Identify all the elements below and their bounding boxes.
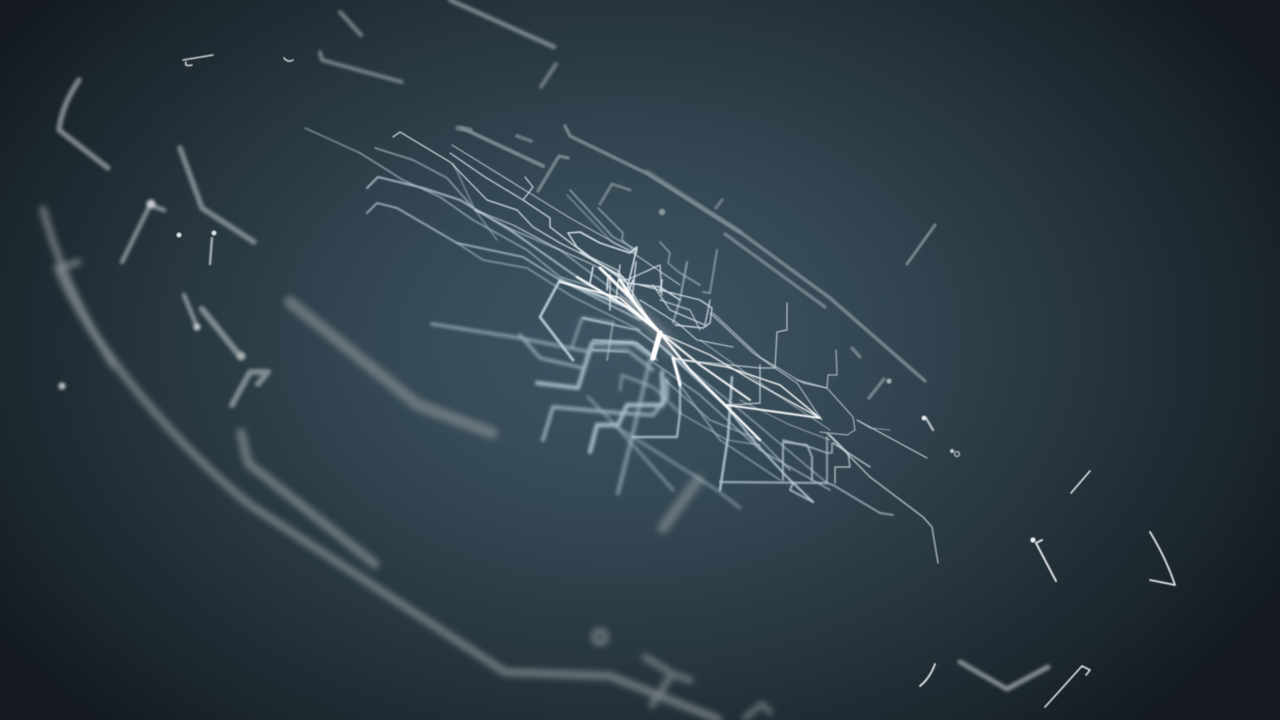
sharp eastern network lines <box>680 303 938 563</box>
outer long arcs, upper right <box>458 126 935 398</box>
bright central hub <box>560 268 820 440</box>
outer blurred arcs, lower left <box>43 209 770 719</box>
small sharp marks, upper left <box>176 55 293 264</box>
mid-focus network lines <box>305 128 893 515</box>
mid blurred strokes, outer left and bottom <box>58 0 1048 689</box>
hub glow <box>625 300 672 350</box>
small sharp marks, lower right <box>920 416 1175 707</box>
sharp upper network lines <box>393 132 733 347</box>
blurred lower network <box>432 318 740 508</box>
